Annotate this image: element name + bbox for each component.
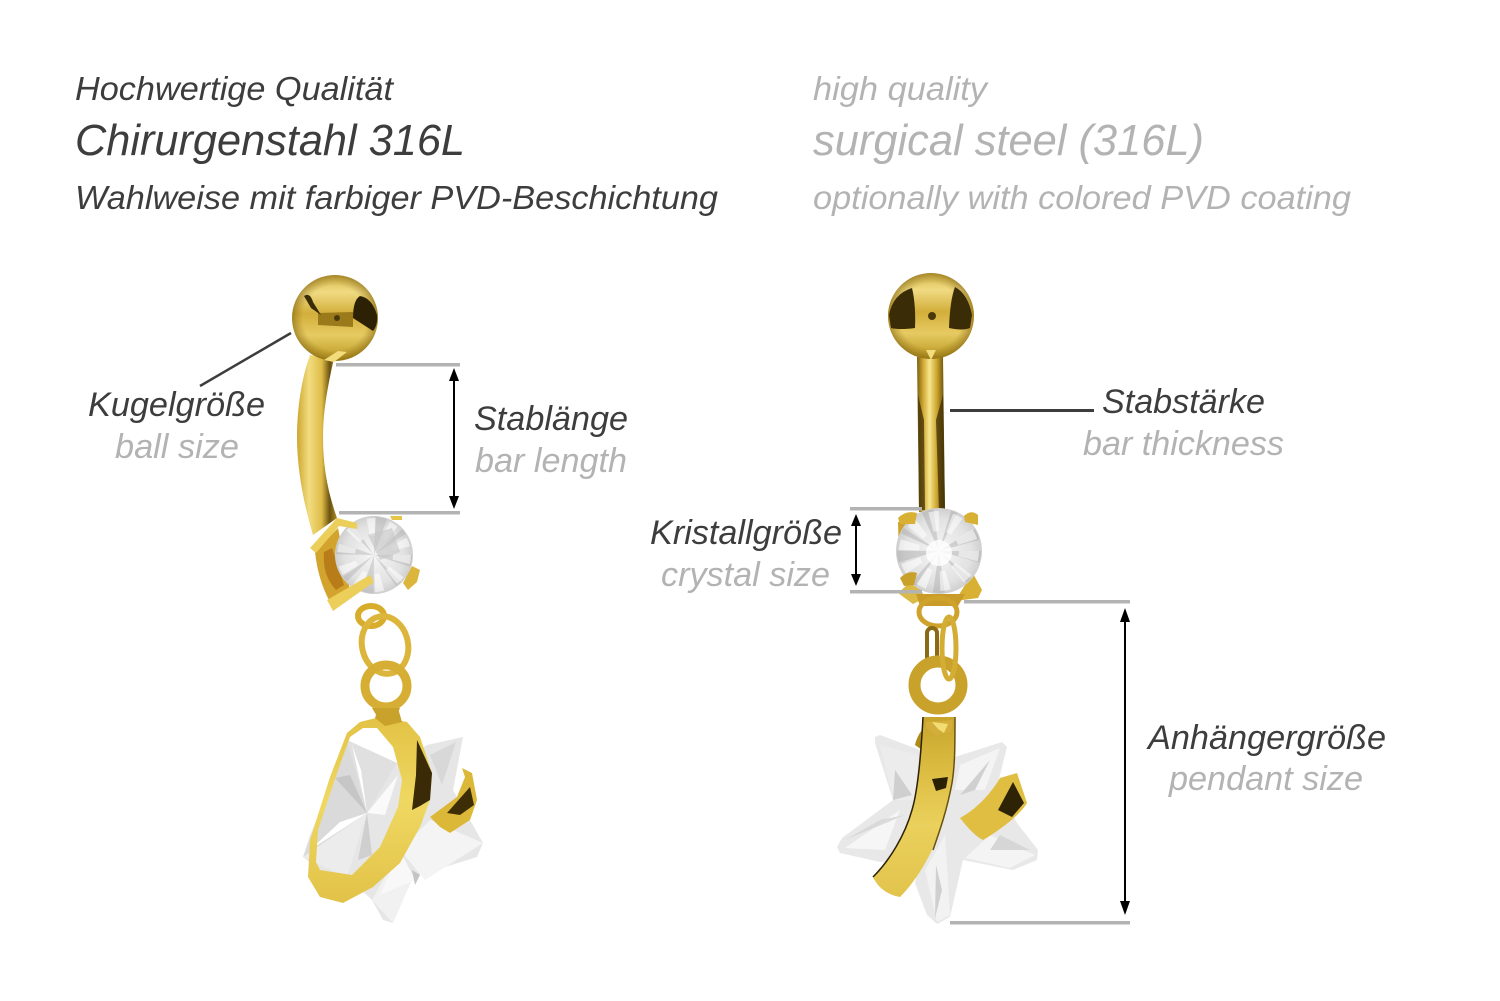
label: bar thickness: [1083, 383, 1284, 463]
subheading: PVD coating German: Wahlweise mit farbiger PVD-Beschichtung: [75, 179, 719, 216]
label: crystal size: crystal size: [661, 556, 830, 594]
subheading: PVD coating English: optionally with colored PVD coating: [813, 179, 1352, 216]
ring connector: [375, 708, 402, 726]
label: bar length: bar length: [475, 442, 627, 480]
measure: ball size leader line: [200, 333, 291, 386]
star crystal: [837, 735, 1038, 924]
label: bar length: Stablänge: [474, 400, 628, 438]
measure: bar length lines and arrow: [336, 363, 460, 514]
ring pendant frame: [308, 717, 432, 903]
heading: high quality English: high quality: [813, 70, 990, 107]
header: English text: [813, 70, 1352, 216]
chain links: [356, 606, 414, 718]
measure: bar thickness leader line: [950, 409, 1094, 412]
label: bar length: [474, 400, 628, 480]
ring dark reflection: [412, 740, 432, 810]
crystal setting cup and prongs: [315, 528, 350, 602]
label: ball size: Kugelgröße: [88, 386, 265, 424]
label: crystal size: [650, 514, 842, 594]
chain links: [914, 598, 962, 708]
label: bar thickness: Stabstärke: [1102, 383, 1265, 421]
crystal prong tips: [310, 516, 420, 611]
label: pendant size: [1146, 719, 1386, 798]
crystal prongs and base: [898, 520, 982, 606]
ball: [888, 273, 974, 360]
left jewellery: side view: [292, 275, 483, 923]
label: ball size: [88, 386, 265, 466]
heading: surgical steel English: surgical steel (316L): [813, 116, 1204, 165]
ball: [292, 275, 378, 362]
heading: high quality German: Hochwertige Qualität: [75, 70, 395, 107]
measure: pendant size lines and arrow: [950, 600, 1130, 924]
pendant band: [873, 717, 955, 897]
crystal prong tips: [898, 512, 978, 586]
small ribbon: [960, 773, 1027, 840]
bar dark reflections: [918, 395, 945, 510]
small ribbon: [430, 768, 477, 833]
straight bar: [917, 357, 945, 512]
label: bar thickness: bar thickness: [1083, 425, 1284, 463]
label: ball size: ball size: [115, 428, 239, 466]
label: crystal size: Kristallgröße: [650, 514, 842, 552]
label: pendant size: pendant size: [1168, 760, 1363, 798]
label: pendant size: Anhängergröße: [1146, 719, 1386, 757]
round crystal: [335, 516, 413, 594]
right jewellery: front view: [837, 273, 1038, 924]
star crystal: [303, 737, 483, 923]
curved bar: [297, 355, 337, 535]
heading: surgical steel German: Chirurgenstahl 316L: [75, 116, 465, 165]
header: German text: [75, 70, 719, 216]
round crystal: [896, 508, 982, 594]
measure: crystal size lines and arrow: [850, 507, 922, 594]
